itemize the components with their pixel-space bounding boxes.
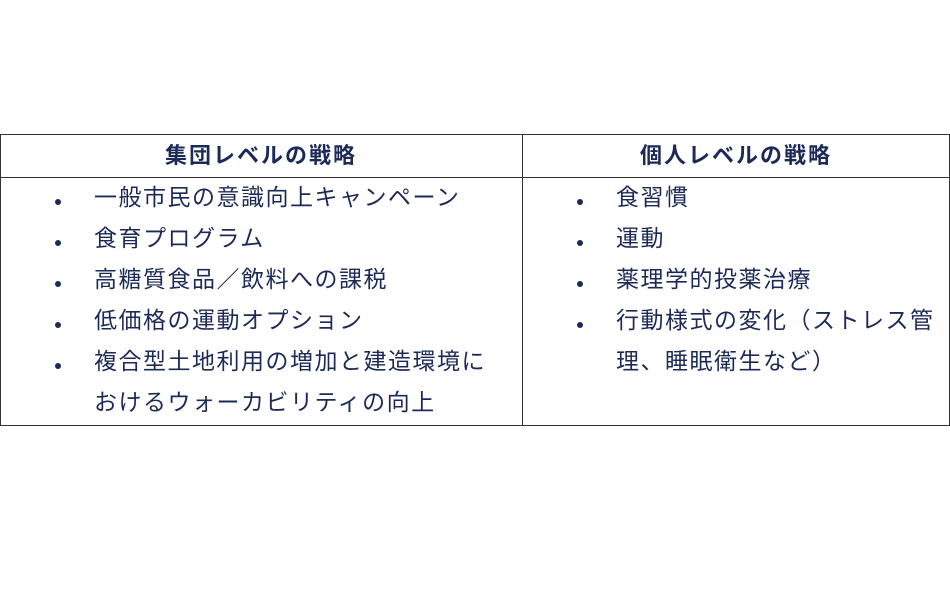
heading: population strategies: 集団レベルの戦略: [165, 143, 357, 168]
heading: individual strategies: 個人レベルの戦略: [640, 143, 832, 168]
list: individual strategies: 食習慣: [616, 184, 690, 210]
list: population strategies: 高糖質食品／飲料への課税: [94, 266, 388, 292]
list: individual strategies: [577, 184, 934, 374]
list: population strategies: [55, 184, 486, 415]
list: population strategies: 複合型土地利用の増加と建造環境に: [94, 348, 486, 374]
list: population strategies: 低価格の運動オプション: [94, 307, 364, 333]
list: population strategies: 一般市民の意識向上キャンペーン: [94, 184, 460, 210]
list: individual strategies: 薬理学的投薬治療: [616, 266, 812, 292]
list: individual strategies: 行動様式の変化（ストレス管: [616, 307, 934, 333]
list: population strategies: おけるウォーカビリティの向上: [94, 389, 436, 415]
list: individual strategies: 理、睡眠衛生など）: [616, 348, 836, 374]
table: [0, 134, 950, 426]
list: individual strategies: 運動: [616, 225, 665, 251]
list: population strategies: 食育プログラム: [94, 225, 265, 251]
